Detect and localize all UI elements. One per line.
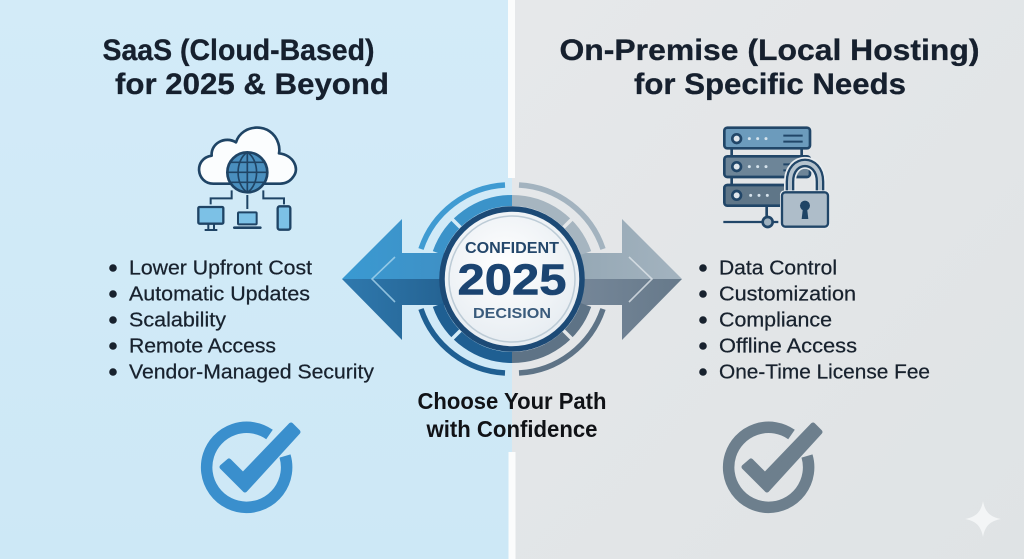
feature list: On-Premise: Customization bbox=[719, 282, 856, 306]
feature list: On-Premise: Compliance bbox=[719, 308, 832, 332]
heading: On-Premise: for Specific Needs bbox=[634, 68, 906, 101]
feature list: On-Premise bbox=[699, 256, 930, 384]
connector lines bbox=[211, 190, 284, 209]
laptop bbox=[234, 212, 260, 228]
cloud bbox=[199, 128, 296, 184]
feature list: On-Premise: Offline Access bbox=[719, 334, 857, 358]
feature list: SaaS: Scalability bbox=[129, 308, 227, 332]
feature list: On-Premise: One-Time License Fee bbox=[719, 360, 930, 384]
feature list: On-Premise: Data Control bbox=[719, 256, 837, 280]
outer rings: blue half bbox=[421, 185, 512, 373]
arrow: right grey bbox=[565, 219, 682, 340]
heading: On-Premise bbox=[560, 34, 980, 101]
feature list: SaaS: Automatic Updates bbox=[129, 282, 310, 306]
panel: SaaS background bbox=[0, 0, 512, 559]
feature list: SaaS: Lower Upfront Cost bbox=[129, 256, 312, 280]
feature list: SaaS: Vendor-Managed Security bbox=[129, 360, 375, 384]
padlock bbox=[780, 163, 830, 229]
icon: server with padlock bbox=[723, 128, 830, 229]
feature list: SaaS bbox=[109, 256, 375, 384]
caption: with Confidence bbox=[426, 416, 598, 442]
heading: SaaS: SaaS (Cloud-Based) bbox=[102, 34, 374, 67]
heading: On-Premise: On-Premise (Local Hosting) bbox=[560, 34, 980, 67]
icon: cloud network bbox=[198, 128, 296, 230]
monitor bbox=[198, 207, 223, 230]
globe bbox=[227, 152, 267, 192]
center badge: DECISION bbox=[473, 305, 551, 322]
outer rings: grey half bbox=[512, 185, 603, 373]
center badge bbox=[442, 209, 582, 349]
heading: SaaS: for 2025 & Beyond bbox=[115, 68, 389, 101]
phone bbox=[278, 206, 290, 230]
panel: On-Premise background bbox=[512, 0, 1024, 559]
server rack bbox=[723, 128, 810, 227]
caption: Choose Your Path bbox=[418, 388, 606, 414]
center badge: CONFIDENT bbox=[465, 240, 560, 257]
arrow: left blue bbox=[342, 219, 460, 340]
center badge: 2025 bbox=[458, 256, 566, 304]
caption bbox=[418, 388, 606, 442]
icon: blue check bbox=[207, 425, 298, 507]
feature list: SaaS: Remote Access bbox=[129, 334, 276, 358]
icon: sparkle bbox=[965, 501, 1001, 537]
icon: grey check bbox=[729, 425, 820, 507]
heading: SaaS bbox=[102, 34, 389, 101]
